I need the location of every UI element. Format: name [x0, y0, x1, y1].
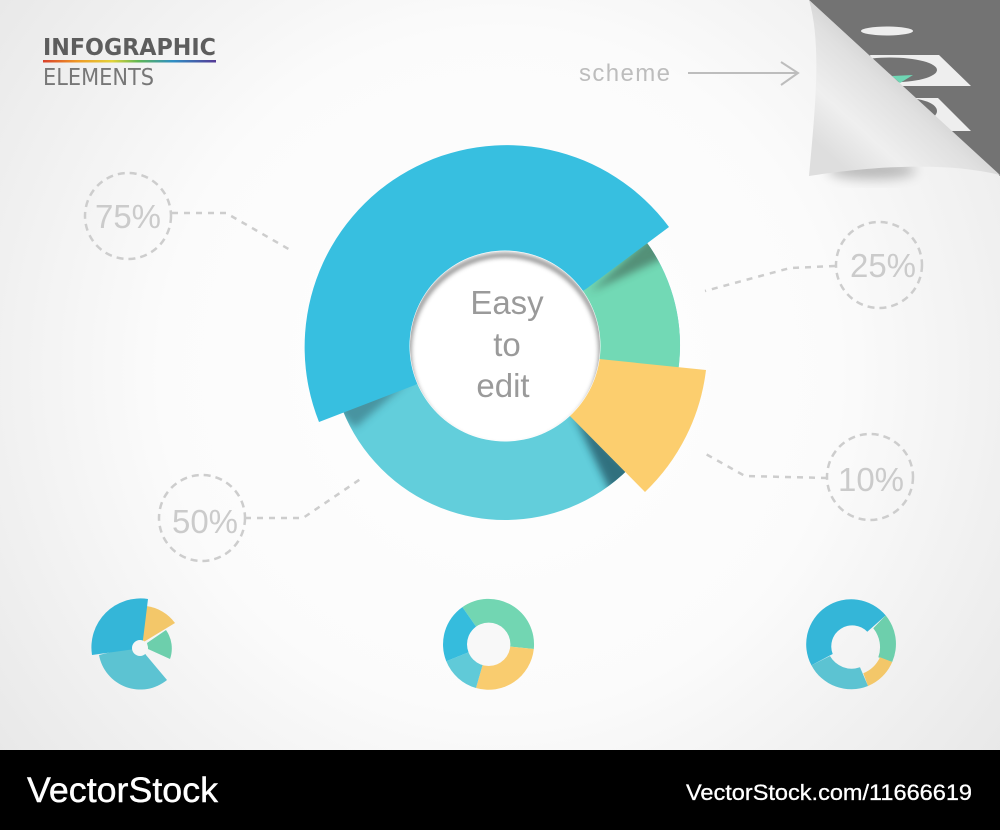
center hole: easy to edit: Easy: [470, 284, 544, 321]
callout: 10%: 10%: [838, 461, 904, 498]
segment: green 25%: [560, 234, 680, 372]
page curl: [809, 0, 1000, 179]
small chart: even donut: [443, 599, 534, 690]
segment: teal 50%: [370, 210, 640, 480]
segment: yellow 10%: [560, 355, 706, 492]
callout: 50%: [159, 475, 362, 561]
center hole: easy to edit: to: [493, 326, 521, 363]
small chart: uneven donut: [806, 599, 896, 689]
title: infographic elements: ELEMENTS: [43, 65, 154, 91]
callout: 25%: 25%: [850, 247, 916, 284]
segment: blue 75%: [305, 145, 669, 422]
page corner: scheme underneath: [809, 0, 1000, 176]
title: infographic elements: [43, 35, 216, 91]
callout: 25%: [705, 222, 922, 308]
scheme label with arrow: scheme: [579, 60, 670, 87]
center hole: easy to edit: edit: [476, 367, 530, 404]
footer bar: VectorStock: [27, 771, 219, 810]
title: infographic elements: INFOGRAPHIC: [43, 35, 216, 61]
small chart: exploded pie: [91, 598, 175, 690]
scheme label with arrow: [579, 60, 798, 87]
callout: 75%: 75%: [95, 198, 161, 235]
callout: 10%: [704, 434, 913, 520]
footer bar: [0, 750, 1000, 830]
shadows under raised segments: [335, 232, 668, 495]
main donut chart: [305, 145, 706, 495]
footer bar: VectorStock.com/11666619: [686, 780, 972, 805]
callout: 50%: 50%: [172, 503, 238, 540]
center hole: easy to edit: [409, 250, 601, 447]
callout: 75%: [85, 173, 292, 259]
